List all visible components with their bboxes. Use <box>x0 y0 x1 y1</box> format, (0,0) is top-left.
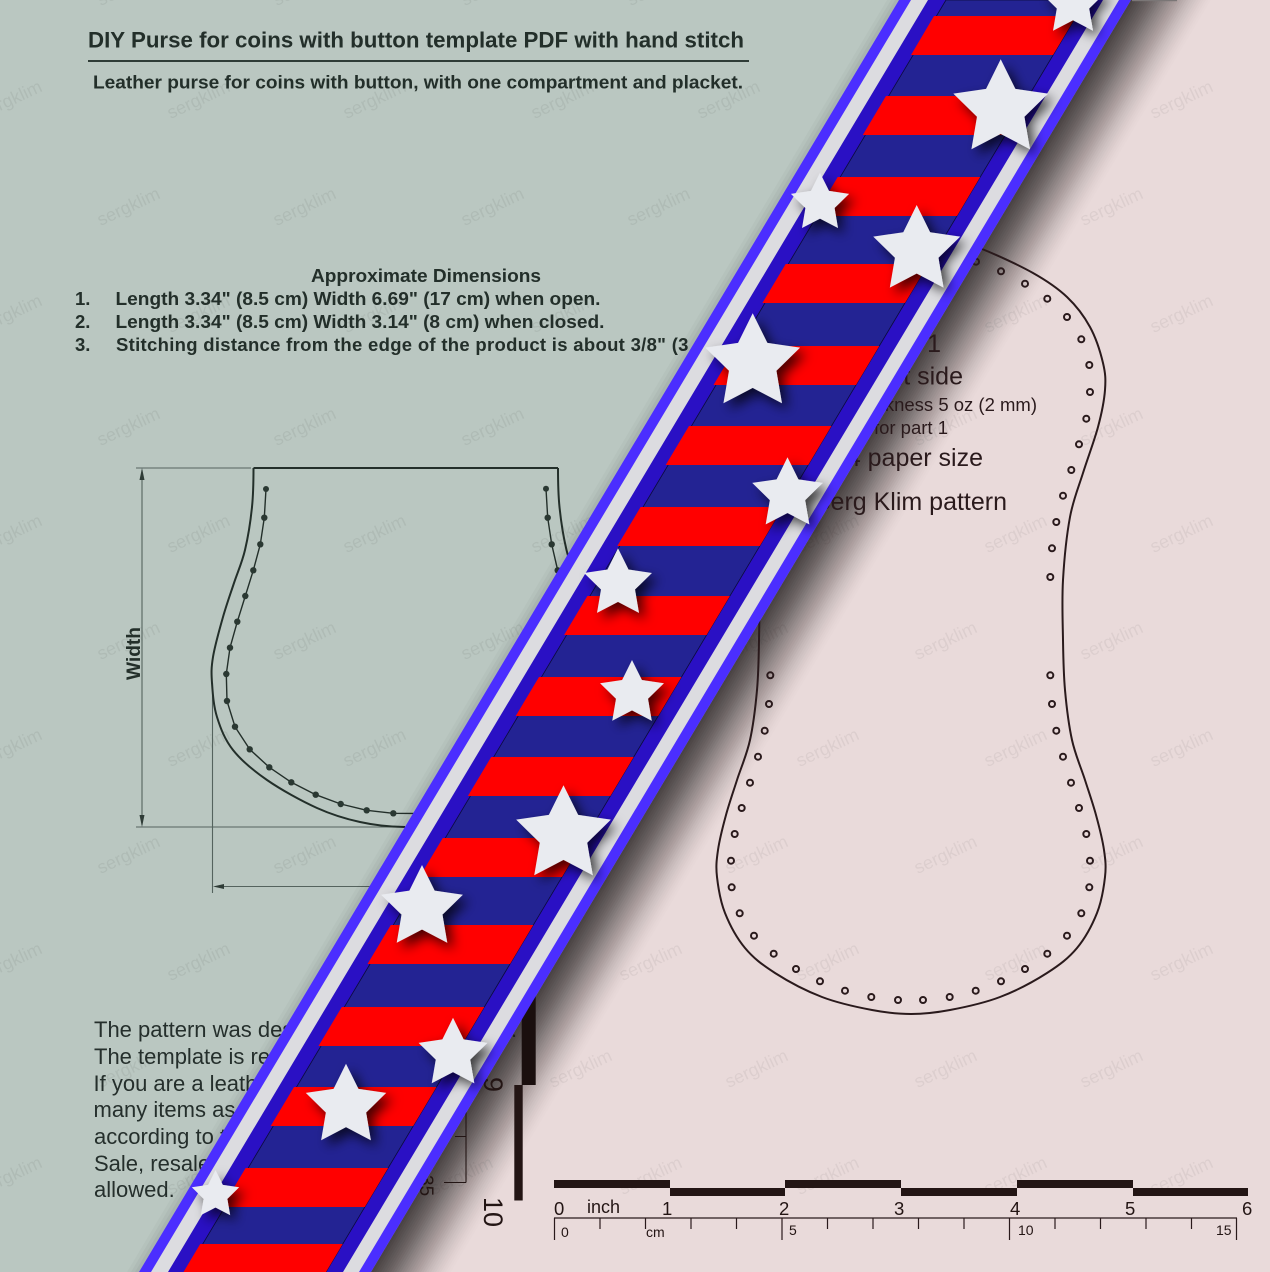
watermarks on right sheet: sergklim <box>722 1045 791 1092</box>
horizontal inch scale bar <box>554 1180 1248 1196</box>
part 1 labels: A4 paper size <box>830 444 983 472</box>
watermarks on right sheet: sergklim <box>981 76 1050 123</box>
vertical scale bar: 9 <box>478 1077 508 1092</box>
watermarks on right sheet: sergklim <box>911 617 980 664</box>
watermarks on left sheet: sergklim <box>458 617 527 664</box>
watermarks on left sheet: sergklim <box>94 183 163 230</box>
diagonal ribbon <box>139 0 1131 1272</box>
watermarks on left sheet: sergklim <box>164 1152 233 1199</box>
watermarks on left sheet: sergklim <box>528 510 597 557</box>
watermarks on right sheet: sergklim <box>1077 617 1146 664</box>
left sheet background <box>0 0 1000 1272</box>
band shadow right <box>371 0 1211 1272</box>
part 1 labels: Part 1 <box>874 330 941 358</box>
watermarks on right sheet: sergklim <box>911 1045 980 1092</box>
part 1 labels: Color for part 1 <box>825 417 948 438</box>
part 1 pattern outline <box>716 249 1106 1014</box>
inch scale labels: inch <box>587 1197 620 1217</box>
purse diagram, closed view <box>124 468 600 893</box>
watermarks on left sheet: sergklim <box>270 831 339 878</box>
inch scale labels: 1 <box>662 1198 672 1219</box>
watermarks on left sheet: sergklim <box>340 76 409 123</box>
star 13 <box>192 1170 239 1215</box>
watermarks on right sheet: sergklim <box>616 938 685 985</box>
cm ruler: cm <box>646 1224 665 1240</box>
description text: If you are a leather craftsman <box>94 1071 380 1096</box>
watermarks on right sheet: sergklim <box>911 403 980 450</box>
watermarks on left sheet: sergklim <box>164 76 233 123</box>
watermarks on left sheet: sergklim <box>270 183 339 230</box>
watermarks on left sheet: sergklim <box>94 617 163 664</box>
watermarks on right sheet: sergklim <box>1147 290 1216 337</box>
watermarks on right sheet: sergklim <box>793 1152 862 1199</box>
watermarks on left sheet: sergklim <box>164 510 233 557</box>
dimension 1: Length 3.34" (8.5 cm) Width 6.69" (17 cm) when open. <box>116 288 600 309</box>
watermarks on left sheet: sergklim <box>340 510 409 557</box>
watermarks on left sheet: sergklim <box>164 724 233 771</box>
star 10 <box>381 865 463 943</box>
watermarks on left sheet: sergklim <box>94 831 163 878</box>
watermarks on right sheet: sergklim <box>616 1152 685 1199</box>
star 5 <box>705 313 800 403</box>
dimensions block <box>75 265 740 355</box>
vertical scale bar <box>478 960 536 1227</box>
watermarks on left sheet: sergklim <box>458 183 527 230</box>
dimensions heading: Approximate Dimensions <box>311 265 541 286</box>
inch scale labels: 5 <box>1125 1198 1135 1219</box>
watermarks on right sheet: sergklim <box>793 510 862 557</box>
star 11 <box>419 1018 487 1083</box>
watermarks on left sheet: sergklim <box>94 1045 163 1092</box>
watermarks on left sheet: sergklim <box>164 938 233 985</box>
vertical cm ruler <box>415 1090 466 1196</box>
star 12 <box>306 1064 386 1140</box>
watermarks on right sheet: sergklim <box>981 938 1050 985</box>
dimension 1: 1. <box>75 288 90 309</box>
watermarks on right sheet: sergklim <box>981 510 1050 557</box>
watermarks on right sheet: sergklim <box>722 831 791 878</box>
dimension lines <box>136 468 500 893</box>
watermarks on left sheet: sergklim <box>340 724 409 771</box>
inch scale labels: 3 <box>894 1198 904 1219</box>
description text: The template is ready to print. <box>94 1044 385 1069</box>
star 1 <box>1041 0 1105 31</box>
watermarks on left sheet: sergklim <box>270 617 339 664</box>
inch scale labels <box>554 1197 1252 1219</box>
star 3 <box>791 173 849 228</box>
description text: allowed. <box>94 1177 175 1202</box>
part 1 stitch holes <box>728 259 1093 1003</box>
stitch holes <box>223 486 561 816</box>
watermarks on right sheet: sergklim <box>1077 1045 1146 1092</box>
watermarks on right sheet: sergklim <box>981 724 1050 771</box>
watermarks on left sheet: sergklim <box>340 290 409 337</box>
description text: The pattern was designed for personal use. <box>94 1017 517 1042</box>
watermarks on right sheet: sergklim <box>427 1152 496 1199</box>
watermarks on left sheet: sergklim <box>624 183 693 230</box>
inch scale labels: 6 <box>1242 1198 1252 1219</box>
description text: Sale, resale of this pattern not <box>94 1151 386 1176</box>
stitch line <box>226 489 440 814</box>
cm ruler <box>554 1218 1237 1240</box>
watermarks on left sheet: sergklim <box>164 290 233 337</box>
dimension 2: Length 3.34" (8.5 cm) Width 3.14" (8 cm) when closed. <box>116 311 604 332</box>
grey border <box>151 0 1119 1272</box>
watermarks on right sheet: sergklim <box>911 183 980 230</box>
watermarks on right sheet: sergklim <box>1147 76 1216 123</box>
star 2 <box>953 59 1048 149</box>
title rule <box>88 60 749 62</box>
star 8 <box>600 660 664 721</box>
top edge bar <box>1132 0 1177 1</box>
inch scale labels: 4 <box>1010 1198 1020 1219</box>
cm ruler: 5 <box>789 1222 797 1238</box>
inch scale labels: 2 <box>779 1198 789 1219</box>
watermarks on right sheet: sergklim <box>546 1045 615 1092</box>
cm ruler: 15 <box>1216 1222 1232 1238</box>
label: width: Width <box>124 627 145 680</box>
watermarks on right sheet: sergklim <box>793 938 862 985</box>
watermarks on left sheet: sergklim <box>528 76 597 123</box>
watermarks on right sheet: sergklim <box>981 290 1050 337</box>
watermarks on right sheet: sergklim <box>1147 938 1216 985</box>
watermarks on right sheet <box>427 76 1216 1199</box>
inch scale labels: 0 <box>554 1198 564 1219</box>
description text: many items as you want <box>94 1097 329 1122</box>
part 1 labels: Serg Klim pattern <box>814 488 1007 516</box>
part 1 labels: Front side <box>852 362 963 390</box>
star 4 <box>873 205 960 288</box>
star 6 <box>752 457 823 524</box>
star 9 <box>516 785 611 875</box>
watermarks on right sheet: sergklim <box>1077 831 1146 878</box>
vertical cm ruler: 35 <box>415 1175 436 1196</box>
dimension 2: 2. <box>75 311 90 332</box>
watermarks on right sheet: sergklim <box>1147 510 1216 557</box>
watermarks on right sheet: sergklim <box>911 831 980 878</box>
description text <box>94 1017 517 1202</box>
part 1 labels <box>788 330 1037 516</box>
watermarks on right sheet: sergklim <box>722 617 791 664</box>
band shadow left <box>127 0 899 1272</box>
watermarks on right sheet: sergklim <box>1147 724 1216 771</box>
star 7 <box>584 548 652 613</box>
title: DIY Purse for coins with button template PDF with hand stitch <box>88 28 744 52</box>
watermarks on left sheet: sergklim <box>528 290 597 337</box>
watermarks on left sheet <box>0 0 763 1199</box>
cm ruler: 0 <box>561 1224 569 1240</box>
watermarks on left sheet: sergklim <box>458 403 527 450</box>
watermarks on left sheet: sergklim <box>94 403 163 450</box>
outer blue border <box>139 0 1131 1272</box>
watermarks on right sheet: sergklim <box>793 724 862 771</box>
dimension 3: 3. <box>75 334 90 355</box>
watermarks on left sheet: sergklim <box>694 76 763 123</box>
arrowheads <box>140 468 224 889</box>
red stripes <box>184 16 1076 1272</box>
watermarks on right sheet: sergklim <box>981 1152 1050 1199</box>
part 1 labels: Leather thickness 5 oz (2 mm) <box>788 394 1037 415</box>
watermarks on left sheet: sergklim <box>270 403 339 450</box>
vertical scale bar: 10 <box>478 1197 508 1227</box>
dark blue border <box>168 0 1103 1272</box>
watermarks on right sheet: sergklim <box>1077 403 1146 450</box>
subtitle: Leather purse for coins with button, with one compartment and placket. <box>93 72 743 92</box>
purse outline <box>212 468 600 827</box>
description text: according to this pattern. <box>94 1124 335 1149</box>
watermarks on right sheet: sergklim <box>1077 183 1146 230</box>
cm ruler: 10 <box>1018 1222 1034 1238</box>
navy centre <box>186 0 1086 1272</box>
watermarks on right sheet: sergklim <box>1147 1152 1216 1199</box>
dimension 3: Stitching distance from the edge of the product is about 3/8" (3 mm). <box>116 334 740 355</box>
